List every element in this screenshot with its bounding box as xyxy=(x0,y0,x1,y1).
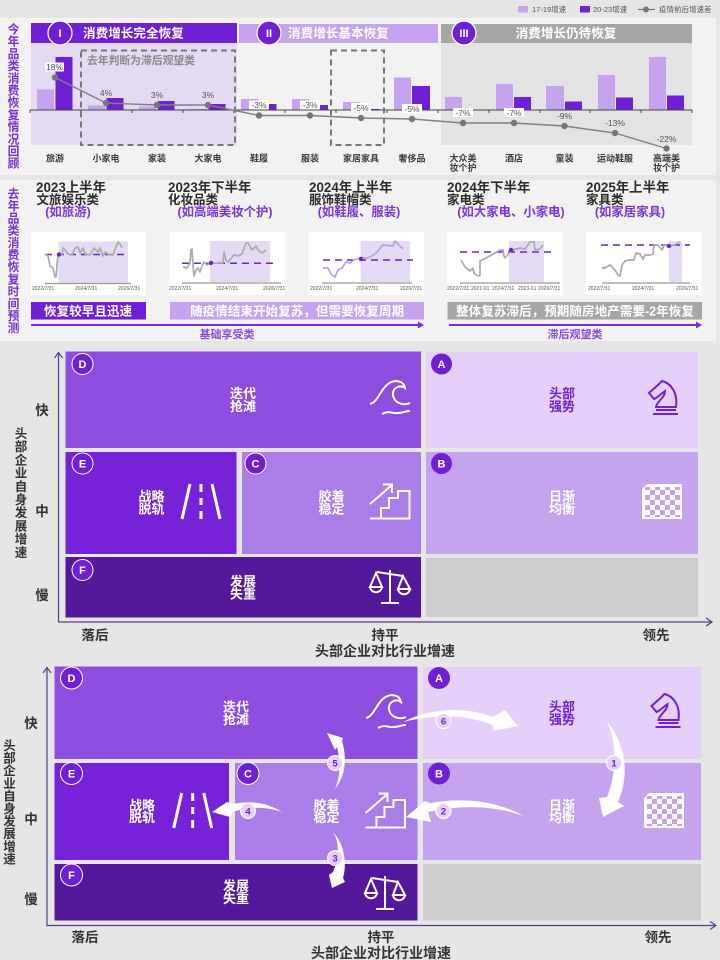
column heading 5: 家具类 xyxy=(586,192,624,207)
header I xyxy=(31,21,237,45)
x axis labels: 持平 xyxy=(368,929,394,945)
heading: vertical this year review: 复 xyxy=(8,108,20,122)
cell E: 脱轨 xyxy=(138,502,165,516)
icon: wave xyxy=(370,381,410,414)
y axis title: 发 xyxy=(15,505,28,520)
y axis title: 身 xyxy=(3,801,16,816)
line chart 1: 2022/7/31 xyxy=(32,286,54,292)
icon: stairs xyxy=(370,484,410,518)
step badges: 3 xyxy=(332,854,338,864)
y axis title: 增 xyxy=(15,532,27,547)
cell F xyxy=(66,557,421,618)
heading: vertical last year forecast: 测 xyxy=(8,321,20,335)
column heading 2: 2023年下半年 xyxy=(168,179,251,195)
category labels: 高端美 xyxy=(653,152,680,164)
arrow: lagging category xyxy=(449,322,702,341)
cell B xyxy=(423,762,701,860)
heading: vertical this year review: 回 xyxy=(8,144,19,158)
x axis labels: 领先 xyxy=(642,627,670,643)
legend: 疫情前后增速差 xyxy=(659,4,712,14)
column heading 3: (如鞋履、服装) xyxy=(318,204,400,219)
step badges: 5 xyxy=(332,758,338,770)
column heading 2 xyxy=(168,179,272,219)
cell C xyxy=(242,452,421,554)
column heading 3: 服饰鞋帽类 xyxy=(309,192,372,207)
icon: road xyxy=(174,793,212,828)
icon: scales xyxy=(370,570,410,603)
heading: vertical last year forecast: 消 xyxy=(8,236,20,250)
line chart: growth gap before and after pandemic xyxy=(52,74,670,152)
category labels: 服装 xyxy=(301,152,319,164)
y axis title: 部 xyxy=(15,439,28,454)
value labels: -7% xyxy=(506,108,522,118)
cell E xyxy=(54,762,229,860)
cell A: A xyxy=(435,673,443,685)
heading: vertical last year forecast: 类 xyxy=(8,224,20,238)
callout: dashed box home furniture xyxy=(331,50,384,145)
line chart 5 xyxy=(586,232,702,295)
empty cell xyxy=(423,864,701,920)
value labels xyxy=(45,62,677,144)
heading: vertical last year forecast: 费 xyxy=(8,248,20,262)
cell E: 战略 xyxy=(129,798,155,813)
cell F: F xyxy=(79,565,86,577)
arrow 3: C to F xyxy=(329,832,345,888)
cell F: 发展 xyxy=(230,574,256,589)
cell C: 稳定 xyxy=(318,502,345,516)
line chart 4: 2023-01 xyxy=(518,286,537,292)
header III xyxy=(441,21,692,45)
arrow 1: A to B xyxy=(599,722,625,817)
cell F: 失重 xyxy=(230,586,256,602)
heading: vertical last year forecast: 预 xyxy=(8,309,20,323)
heading: vertical this year review: 品 xyxy=(8,47,19,61)
value labels: -3% xyxy=(251,100,267,110)
band: recovery after pandemic xyxy=(170,302,424,320)
line chart 5: 2024/7/31 xyxy=(632,286,654,292)
y axis labels: 中 xyxy=(35,503,49,519)
matrix 1: leading enterprise growth xyxy=(15,352,712,659)
cell C: 胶着 xyxy=(318,489,345,504)
value labels: -5% xyxy=(404,104,420,114)
cell C xyxy=(235,762,418,860)
y axis title: 自 xyxy=(15,479,27,494)
band: lagging recovery: 整体复苏滞后，预期随房地产需要-2年恢复 xyxy=(456,304,694,318)
cell E: 脱轨 xyxy=(129,810,155,825)
column heading 4: 2024年下半年 xyxy=(447,179,530,195)
category labels: 奢侈品 xyxy=(398,152,426,164)
icon: checkerboard xyxy=(644,793,684,828)
x axis labels: 领先 xyxy=(644,929,672,945)
cell D xyxy=(66,352,421,448)
cell E xyxy=(66,452,236,554)
icon: wave xyxy=(366,695,406,728)
arrow 4: C to E xyxy=(212,802,282,817)
y axis title: 部 xyxy=(3,751,16,766)
cell D: D xyxy=(79,359,87,371)
column heading 1: (如旅游) xyxy=(45,204,91,219)
line chart 4 xyxy=(447,232,562,295)
cell C: 胶着 xyxy=(313,798,340,813)
column heading 5: 2025年上半年 xyxy=(586,179,669,195)
category labels: 旅游 xyxy=(46,152,64,164)
cell B xyxy=(426,452,698,554)
value labels: -7% xyxy=(455,108,471,118)
cell D xyxy=(54,666,418,759)
cell F: 失重 xyxy=(223,891,249,906)
category labels: 妆个护 xyxy=(449,162,477,173)
value labels: -22% xyxy=(657,134,677,144)
icon: knight xyxy=(649,381,678,414)
heading: vertical this year review: 顾 xyxy=(8,157,20,171)
step badges: 1 xyxy=(611,758,617,770)
value labels: 18% xyxy=(46,62,63,72)
line chart 3: 2022/7/31 xyxy=(310,286,332,292)
line chart 4: 2024/7/31 xyxy=(492,286,514,292)
cell B: 均衡 xyxy=(549,810,575,825)
line chart 2: 2022/7/31 xyxy=(169,286,191,292)
cell D: 迭代 xyxy=(230,386,256,401)
y axis labels xyxy=(24,716,38,907)
header II: 消费增长基本恢复 xyxy=(288,26,389,40)
line chart 5: 2026/7/31 xyxy=(676,286,698,292)
cell F xyxy=(54,864,418,920)
cell F: F xyxy=(68,870,75,882)
cell A xyxy=(426,352,698,448)
line chart 3: 2024/7/31 xyxy=(356,286,378,292)
cell C: C xyxy=(244,768,252,780)
heading: vertical last year forecast: 间 xyxy=(8,297,20,311)
heading: vertical last year forecast: 恢 xyxy=(8,260,20,274)
heading: vertical last year forecast: 时 xyxy=(8,285,20,299)
cell A: 头部 xyxy=(549,386,575,401)
y axis labels: 中 xyxy=(24,811,38,827)
line chart 4: 2021-01 xyxy=(471,286,490,292)
cell E: E xyxy=(79,458,86,470)
arrow 5: C to D xyxy=(327,733,345,789)
cell D: D xyxy=(68,673,76,685)
x axis labels xyxy=(82,627,670,643)
heading: vertical last year forecast: 品 xyxy=(8,211,19,225)
column heading 2: (如高端美妆个护) xyxy=(178,204,272,219)
column heading 1: 2023上半年 xyxy=(36,179,106,195)
band: early recovery xyxy=(31,302,146,320)
heading: vertical last year forecast: 复 xyxy=(8,272,20,286)
value labels: -3% xyxy=(302,100,318,110)
cell A: A xyxy=(438,359,446,371)
column heading 4: 家电类 xyxy=(447,192,485,207)
line chart 2: 2026/7/31 xyxy=(263,286,285,292)
arrow: basic enjoyment category xyxy=(31,322,424,341)
icon: knight xyxy=(652,694,680,727)
header III: 消费增长仍待恢复 xyxy=(516,26,617,40)
heading: vertical last year forecast: 年 xyxy=(8,199,20,213)
cell C: C xyxy=(252,458,260,470)
legend xyxy=(518,4,712,14)
section backgrounds xyxy=(31,43,692,145)
category labels xyxy=(46,152,680,173)
x axis title: 头部企业对比行业增速 xyxy=(315,643,455,659)
y axis labels: 快 xyxy=(24,716,38,731)
header II: II xyxy=(266,28,272,40)
value labels: -5% xyxy=(353,103,369,113)
y axis title: 速 xyxy=(15,545,28,560)
y axis title: 业 xyxy=(3,777,16,791)
y axis labels: 慢 xyxy=(35,587,49,603)
cell A: 强势 xyxy=(549,399,575,414)
heading: vertical this year review: 情 xyxy=(8,120,20,134)
category labels: 家居家具 xyxy=(343,152,379,164)
x axis labels: 落后 xyxy=(82,627,109,643)
header III: III xyxy=(459,28,469,40)
line chart 3: 2026/7/31 xyxy=(400,286,422,292)
category labels: 运动鞋服 xyxy=(597,152,633,164)
category labels: 妆个护 xyxy=(653,162,680,173)
line chart 2 xyxy=(169,232,285,295)
cell D: 迭代 xyxy=(223,700,249,714)
matrix 2: migration paths xyxy=(3,666,716,960)
cell E: 战略 xyxy=(138,489,165,504)
y axis title: 自 xyxy=(3,788,16,803)
y axis title: 企 xyxy=(3,763,16,778)
header II xyxy=(239,21,438,45)
line chart 4: 2022/7/31 xyxy=(447,286,469,292)
icon: stairs xyxy=(366,794,405,828)
step badges: 6 xyxy=(441,716,446,728)
category labels: 童装 xyxy=(555,152,574,164)
heading: vertical this year review: 年 xyxy=(8,35,20,49)
value labels: 4% xyxy=(100,88,113,98)
panel: last year's recovery timing forecast xyxy=(0,179,716,341)
line chart 3 xyxy=(308,232,424,295)
y axis labels xyxy=(35,403,49,603)
callout: dashed box judged as lagging last year: 去年判断为滞后观望类 xyxy=(87,53,195,67)
column heading 2: 化妆品类 xyxy=(168,192,219,207)
axes xyxy=(43,668,716,930)
header I: I xyxy=(58,28,62,40)
heading: vertical this year review: 类 xyxy=(8,59,20,73)
column heading 1 xyxy=(36,179,106,219)
arrow 2: B to C xyxy=(406,800,524,822)
cell B: 日渐 xyxy=(549,798,575,813)
cell C: 稳定 xyxy=(313,810,340,825)
y axis title: 展 xyxy=(3,827,16,841)
step badges: 4 xyxy=(245,806,251,818)
cell A xyxy=(423,667,701,759)
header I: 消费增长完全恢复 xyxy=(83,26,184,40)
line chart 5: 2022/7/31 xyxy=(588,286,610,292)
y axis title: 头 xyxy=(3,738,16,753)
y axis title: 业 xyxy=(15,467,27,481)
y axis title: 身 xyxy=(15,492,27,507)
value labels: 3% xyxy=(202,90,215,100)
icon: road xyxy=(182,484,220,519)
column heading 1: 文旅娱乐类 xyxy=(36,192,100,207)
cell F: 发展 xyxy=(223,878,249,894)
y axis title: 增 xyxy=(3,839,16,854)
column heading 5 xyxy=(586,179,669,219)
heading: vertical this year review: 况 xyxy=(8,132,20,146)
x axis labels: 持平 xyxy=(372,627,398,643)
legend: 17-19增速 xyxy=(532,4,567,14)
y axis labels: 快 xyxy=(35,403,49,418)
value labels: -13% xyxy=(605,118,625,128)
arrow: lagging category: 滞后观望类 xyxy=(548,327,602,341)
y axis title: 企 xyxy=(15,452,28,467)
y axis title: 头 xyxy=(15,426,27,441)
step badges: 2 xyxy=(441,806,446,818)
y axis title: 速 xyxy=(3,851,16,866)
y axis labels: 慢 xyxy=(24,891,38,907)
category labels: 鞋履 xyxy=(250,152,268,164)
icon: scales xyxy=(365,876,405,909)
step badges xyxy=(240,714,622,866)
legend: 20-23增速 xyxy=(593,4,628,14)
callout: dashed box judged as lagging last year xyxy=(81,50,235,145)
cell B: 日渐 xyxy=(549,489,575,504)
line chart 1 xyxy=(31,232,146,295)
heading: vertical last year forecast: 去 xyxy=(8,187,20,201)
icon: checkerboard xyxy=(642,484,682,519)
heading: vertical this year review: 费 xyxy=(8,84,20,98)
column heading 4 xyxy=(447,179,565,219)
cell D: 抢滩 xyxy=(223,712,249,727)
category labels: 酒店 xyxy=(505,152,523,164)
y axis title: 展 xyxy=(15,519,28,533)
column heading 4: (如大家电、小家电) xyxy=(457,204,565,219)
empty cell xyxy=(426,558,698,617)
cell D: 抢滩 xyxy=(230,399,256,414)
line chart 4: 2026/7/31 xyxy=(538,286,560,292)
column heading 3 xyxy=(309,179,400,219)
category labels: 家装 xyxy=(148,152,166,164)
cell B: B xyxy=(435,768,443,780)
value labels: -9% xyxy=(557,111,572,121)
cell A: 头部 xyxy=(549,700,575,714)
arrow: basic enjoyment category: 基础享受类 xyxy=(200,327,254,341)
x axis labels: 落后 xyxy=(72,929,99,945)
panel: this year's category recovery review xyxy=(0,18,716,175)
arrow 6: D to A xyxy=(403,710,518,731)
y axis title: 发 xyxy=(3,814,16,829)
value labels: 3% xyxy=(151,90,164,100)
line chart 1: 2024/7/31 xyxy=(75,286,97,292)
cell B: 均衡 xyxy=(549,502,575,516)
axes xyxy=(54,352,712,626)
column heading 5: (如家居家具) xyxy=(595,204,665,219)
cell A: 强势 xyxy=(549,712,575,727)
band: early recovery: 恢复较早且迅速 xyxy=(44,304,132,318)
category labels: 大众美 xyxy=(449,152,477,164)
bar chart: growth by category xyxy=(30,57,692,113)
heading: vertical this year review: 消 xyxy=(8,71,20,85)
x axis labels xyxy=(72,929,672,945)
line chart 1: 2026/7/31 xyxy=(118,286,140,292)
cell B: B xyxy=(438,458,446,470)
category labels: 大家电 xyxy=(194,152,222,164)
cell E: E xyxy=(68,768,75,780)
column heading 3: 2024年上半年 xyxy=(309,179,392,195)
heading: vertical this year review: 今 xyxy=(8,22,20,36)
band: recovery after pandemic: 随疫情结束开始复苏，但需要恢复周期 xyxy=(190,304,404,318)
category labels: 小家电 xyxy=(92,152,120,164)
line chart 2: 2024/7/31 xyxy=(216,286,238,292)
heading: vertical this year review: 恢 xyxy=(8,96,20,110)
